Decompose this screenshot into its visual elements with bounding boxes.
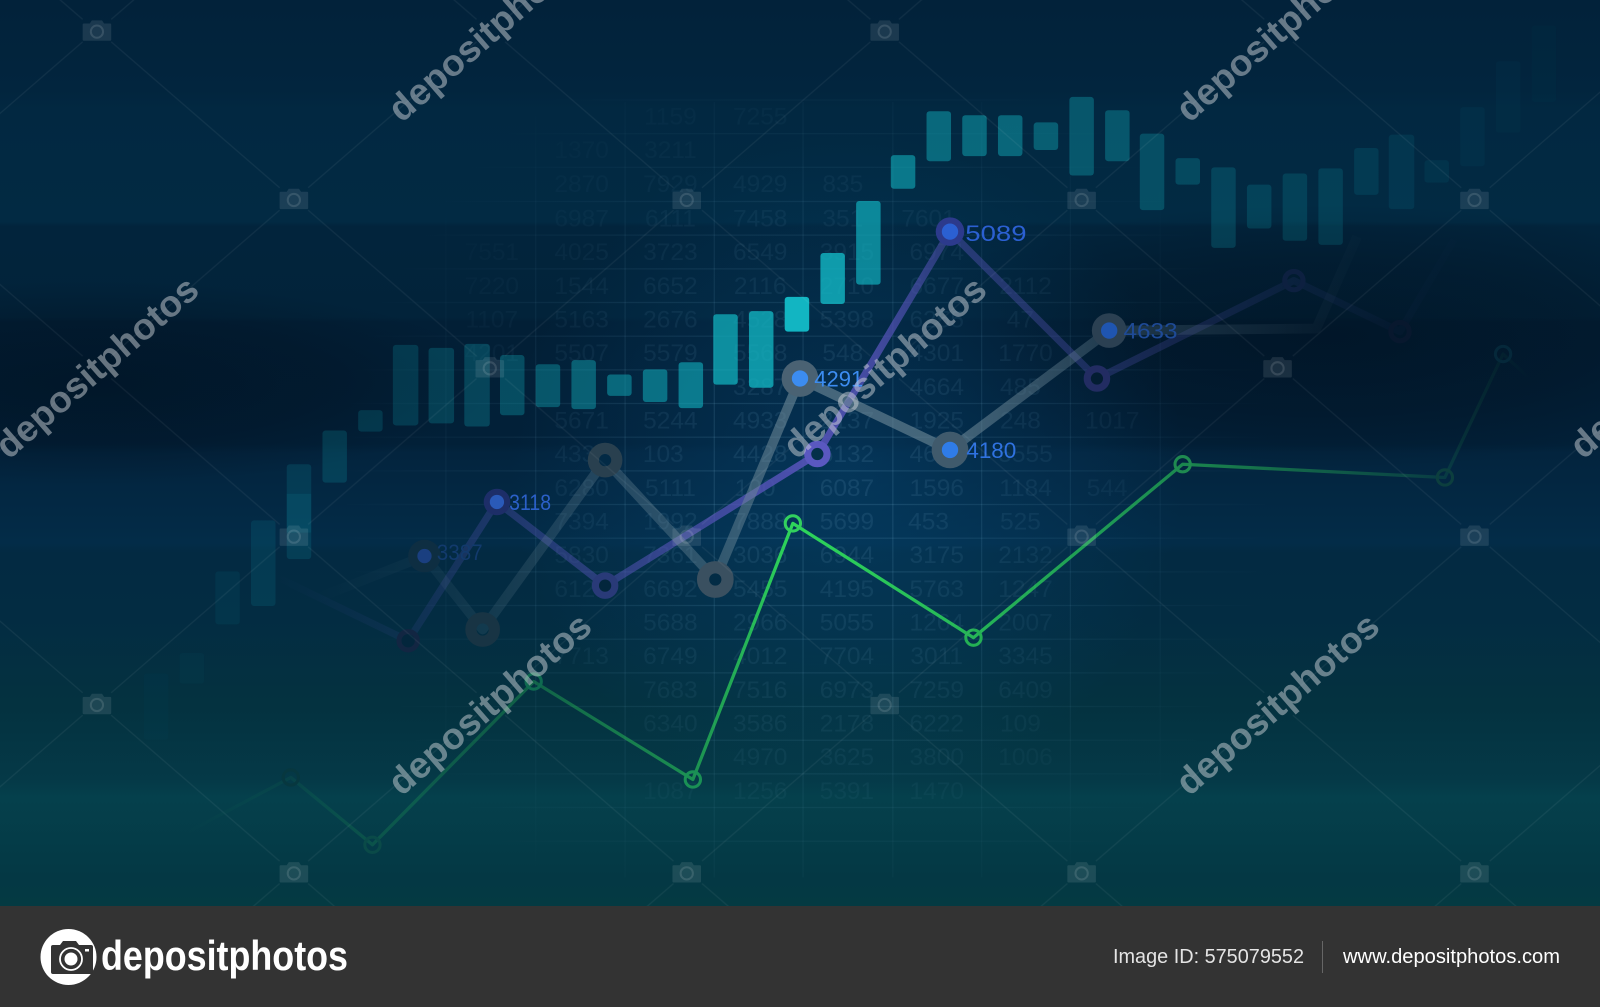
data table numbers: 485	[1000, 374, 1041, 401]
data table numbers: 6087	[820, 475, 874, 502]
series value labels: 5089	[965, 221, 1027, 246]
data table numbers: 5568	[733, 340, 787, 367]
data table numbers: 5055	[820, 610, 874, 637]
data table numbers: 2007	[998, 610, 1053, 637]
data table numbers: 4528	[733, 307, 787, 334]
data table numbers: 1770	[998, 340, 1053, 367]
data table numbers: 5111	[645, 475, 696, 502]
data table numbers: 1006	[998, 744, 1053, 771]
data table numbers: 4025	[554, 239, 609, 266]
data table numbers: 6255	[910, 307, 964, 334]
data table numbers: 7601	[901, 206, 956, 232]
data table numbers: 1184	[999, 475, 1052, 502]
data table numbers: 5688	[643, 610, 698, 637]
data table numbers: 2112	[999, 273, 1052, 300]
data table numbers: 7361	[643, 542, 698, 569]
data table numbers: 1370	[554, 137, 609, 164]
data table numbers: 7929	[643, 171, 698, 198]
data table numbers: 100	[735, 475, 776, 502]
data table numbers: 3175	[910, 542, 964, 569]
data table numbers: 6222	[910, 711, 964, 738]
data table numbers: 6677	[910, 273, 964, 300]
data table numbers: 1470	[910, 778, 964, 805]
data table numbers: 835	[822, 171, 863, 198]
data table numbers: 6280	[554, 475, 609, 502]
data table numbers: 1992	[643, 509, 698, 536]
depositphotos watermarks: depositphotos	[775, 268, 994, 466]
image id: Image ID: 575079552	[1113, 946, 1304, 968]
data table numbers: 7704	[820, 643, 874, 670]
blue line series	[276, 217, 1454, 650]
data table numbers: 2178	[820, 711, 874, 738]
data table numbers: 7888	[733, 509, 787, 536]
data table numbers: 5455	[733, 576, 787, 603]
data table numbers: 3723	[643, 239, 698, 266]
data table numbers: 5507	[554, 340, 609, 367]
candlestick bars	[144, 26, 1556, 740]
green line series	[189, 346, 1551, 852]
data table numbers: 2132	[998, 542, 1053, 569]
data table numbers: 5699	[820, 509, 874, 536]
data table numbers: 5244	[643, 408, 698, 435]
data table numbers: 2676	[643, 307, 698, 334]
data table numbers: 5830	[554, 542, 609, 569]
data table numbers: 1159	[644, 103, 697, 130]
data table numbers: 7683	[643, 677, 698, 704]
data table numbers: 2966	[733, 610, 787, 637]
footer logo	[40, 929, 348, 985]
data table numbers: 544	[1087, 475, 1128, 502]
data table numbers: 2870	[554, 171, 609, 198]
data table numbers: 548	[822, 340, 863, 367]
data table numbers	[465, 103, 1139, 805]
series value labels: 4180	[966, 438, 1016, 463]
data table numbers: 6549	[733, 239, 787, 266]
data table numbers: 3800	[910, 744, 964, 771]
data table numbers: 2710	[820, 273, 874, 300]
data table numbers: 6749	[643, 643, 698, 670]
footer bar	[0, 906, 1600, 1007]
data table numbers: 6944	[820, 542, 874, 569]
data table numbers: 6132	[820, 441, 874, 468]
divider	[1322, 941, 1323, 973]
data table numbers: 4301	[910, 340, 964, 367]
series value labels: 4291	[814, 367, 863, 392]
data table numbers: 4667	[910, 441, 964, 468]
data table numbers: 6340	[643, 711, 698, 738]
data table numbers: 7255	[733, 103, 787, 130]
data table numbers: 5763	[910, 576, 964, 603]
data table numbers: 5391	[820, 778, 874, 805]
watermark camera icons	[83, 20, 1489, 883]
data table numbers: 4337	[554, 441, 609, 468]
data table numbers: 6973	[820, 677, 874, 704]
data table numbers: 3036	[733, 542, 787, 569]
data table numbers: 4201	[465, 340, 519, 367]
data table numbers: 5555	[998, 441, 1053, 468]
data table numbers: 109	[1000, 711, 1041, 738]
data table numbers: 103	[643, 441, 684, 468]
data table numbers: 2116	[734, 273, 787, 300]
data table numbers: 5163	[554, 307, 609, 334]
data table numbers: 3586	[733, 711, 787, 738]
data table grid	[347, 100, 1265, 877]
data table numbers: 6111	[645, 206, 696, 232]
data table numbers: 1925	[910, 408, 964, 435]
data table numbers: 6692	[643, 576, 698, 603]
data table numbers: 3011	[910, 643, 963, 670]
data table numbers: 248	[1000, 408, 1041, 435]
data table numbers: 525	[1000, 509, 1041, 536]
data table numbers: 6652	[643, 273, 698, 300]
data table numbers: 4428	[733, 441, 787, 468]
data table numbers: 1247	[998, 576, 1053, 603]
data table numbers: 3345	[998, 643, 1053, 670]
depositphotos watermarks: depositphotos	[1168, 605, 1387, 803]
data table numbers: 5671	[554, 408, 609, 435]
data table numbers: 453	[908, 509, 949, 536]
data table numbers: 4970	[733, 744, 787, 771]
website url: www.depositphotos.com	[1342, 946, 1560, 968]
data table numbers: 7458	[733, 206, 787, 232]
series value labels: 3118	[509, 490, 551, 515]
data table numbers: 5398	[820, 307, 874, 334]
series value labels: 3387	[437, 540, 483, 565]
series value labels	[437, 221, 1178, 565]
data table numbers: 7713	[554, 643, 609, 670]
data table numbers: 3211	[644, 137, 697, 164]
data table numbers: 6974	[910, 239, 964, 266]
data table numbers: 4664	[910, 374, 964, 401]
data table numbers: 6409	[998, 677, 1053, 704]
footer logo: depositphotos	[101, 932, 348, 979]
data table numbers: 3915	[820, 239, 874, 266]
data table numbers: 4933	[733, 408, 787, 435]
data table numbers: 1107	[466, 307, 518, 334]
data table numbers: 47	[1007, 307, 1034, 334]
data table numbers: 1264	[910, 610, 964, 637]
data table numbers: 1256	[733, 778, 787, 805]
data table numbers: 3287	[733, 374, 787, 401]
data table numbers: 1087	[643, 778, 698, 805]
data table numbers: 351	[822, 206, 863, 232]
data table numbers: 7220	[465, 273, 519, 300]
data table numbers: 1596	[910, 475, 964, 502]
data table numbers: 6987	[554, 206, 609, 232]
data table numbers: 5579	[643, 340, 698, 367]
data table numbers: 3625	[820, 744, 874, 771]
data table numbers: 7516	[733, 677, 787, 704]
data table numbers: 7394	[554, 509, 609, 536]
depositphotos watermarks: depositphotos	[380, 605, 599, 803]
data table numbers: 4012	[733, 643, 787, 670]
data table numbers: 1017	[1085, 408, 1139, 435]
data table numbers: 7551	[465, 239, 519, 266]
data table numbers: 6127	[554, 576, 609, 603]
data table numbers: 7259	[910, 677, 964, 704]
data table numbers: 1544	[554, 273, 609, 300]
data table numbers: 4929	[733, 171, 787, 198]
gray line series	[281, 237, 1357, 641]
series value labels: 4633	[1123, 319, 1178, 344]
data table numbers: 4195	[820, 576, 874, 603]
data table numbers: 2137	[820, 408, 874, 435]
depositphotos watermarks	[0, 0, 1600, 803]
